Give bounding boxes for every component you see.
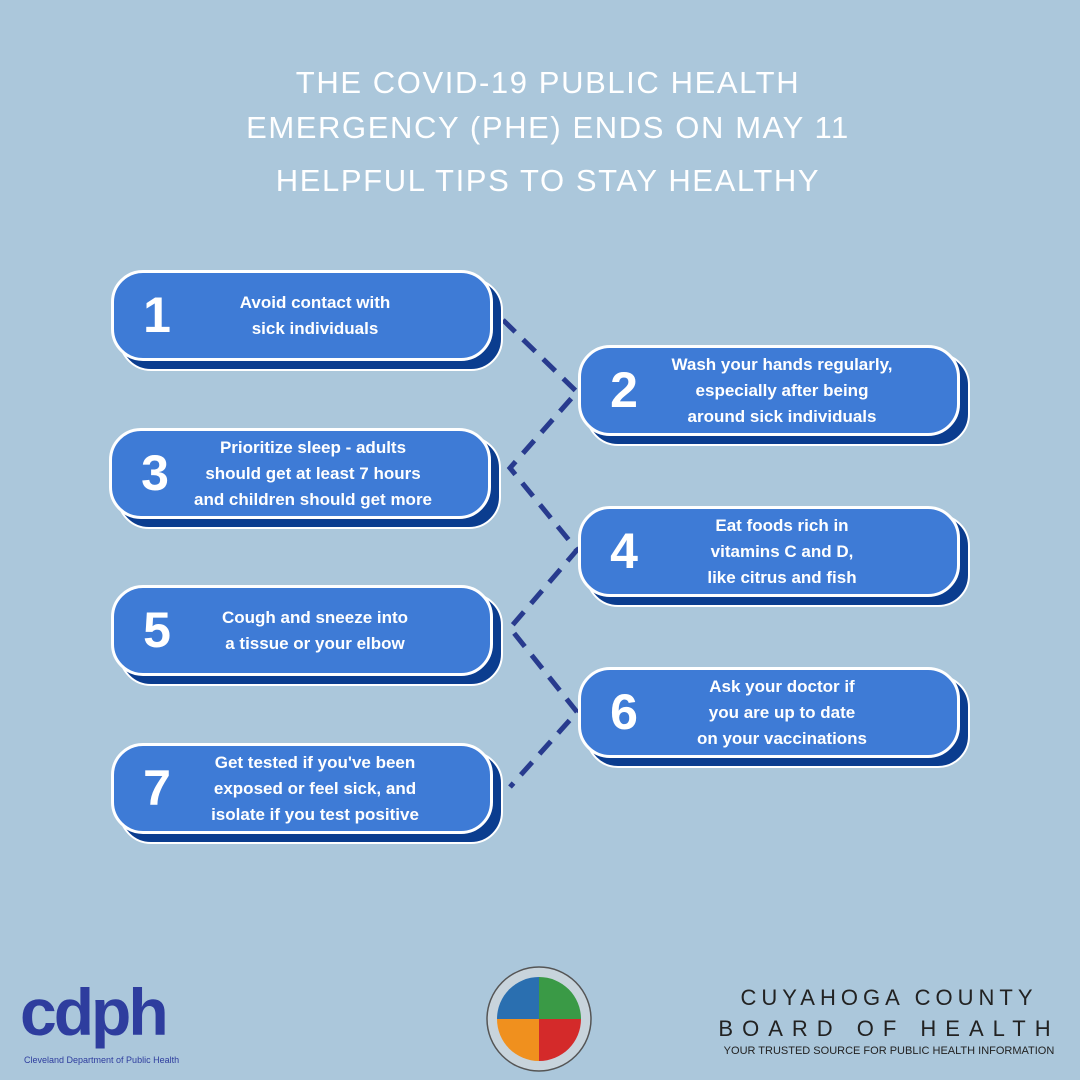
- card 2: Wash your hands regularly,: [671, 354, 893, 374]
- card 6: 6: [610, 684, 638, 740]
- logo: county seal: [486, 966, 592, 1072]
- card 5: 5: [143, 602, 171, 658]
- card 2: especially after being: [696, 380, 868, 400]
- card 7: Get tested if you've been: [215, 752, 415, 772]
- card 2: [578, 345, 970, 446]
- card 7: 7: [143, 760, 171, 816]
- card 2: around sick individuals: [688, 406, 876, 426]
- card 6: you are up to date: [709, 702, 855, 722]
- card 6: Ask your doctor if: [709, 676, 855, 696]
- card 3: should get at least 7 hours: [205, 464, 421, 482]
- card 3: Prioritize sleep - adults: [220, 438, 406, 456]
- card 4: like citrus and fish: [707, 568, 857, 586]
- card 4: Eat foods rich in: [715, 516, 849, 534]
- title: EMERGENCY (PHE) ENDS ON MAY 11: [246, 110, 850, 145]
- card 5: [111, 585, 503, 686]
- logo: Cuyahoga County Board of Health: CUYAHOGA COUNTY: [740, 985, 1038, 1010]
- card 7: exposed or feel sick, and: [214, 778, 416, 798]
- card 3: [109, 428, 501, 529]
- card 5: a tissue or your elbow: [225, 634, 405, 652]
- title: [246, 65, 850, 145]
- card 7: [111, 743, 503, 844]
- card 4: 4: [610, 523, 638, 579]
- subtitle: HELPFUL TIPS TO STAY HEALTHY: [276, 163, 820, 198]
- card 6: on your vaccinations: [697, 728, 867, 748]
- title: THE COVID-19 PUBLIC HEALTH: [296, 65, 800, 100]
- card 7: isolate if you test positive: [211, 804, 419, 824]
- card 1: 1: [143, 287, 171, 343]
- card 6: [578, 667, 970, 768]
- card 1: sick individuals: [252, 318, 378, 338]
- card 5: Cough and sneeze into: [222, 608, 408, 626]
- card 2: 2: [610, 362, 638, 418]
- card 4: [578, 506, 970, 607]
- card 3: and children should get more: [194, 490, 432, 508]
- logo: Cuyahoga County Board of Health: [718, 985, 1060, 1057]
- card 4: vitamins C and D,: [711, 542, 853, 560]
- logo: Cuyahoga County Board of Health: YOUR TRUSTED SOURCE FOR PUBLIC HEALTH INFORMATION: [724, 1045, 1054, 1057]
- card 3: 3: [141, 445, 169, 501]
- logo: cdph: Cleveland Department of Public Health: [24, 1055, 179, 1065]
- logo: Cuyahoga County Board of Health: BOARD OF HEALTH: [718, 1016, 1060, 1041]
- card 1: Avoid contact with: [240, 292, 390, 312]
- card 1: [111, 270, 503, 371]
- logo: cdph: cdph: [20, 975, 166, 1049]
